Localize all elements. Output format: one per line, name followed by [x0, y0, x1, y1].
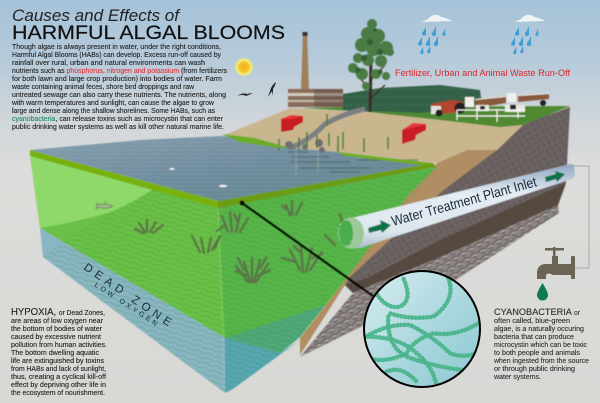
factory [288, 32, 343, 107]
green water drop [537, 283, 548, 300]
hypoxia text: The bottom dwelling aquatic [11, 349, 99, 357]
line to magnified circle [240, 200, 373, 296]
cornfield [343, 85, 482, 113]
deeper teal zone [225, 305, 325, 353]
front corner line [218, 207, 225, 393]
cyanobacteria text: microcystin which can be toxic [494, 342, 587, 349]
dead zone label: LOW OXYGEN [93, 282, 160, 329]
shoreline rocks [285, 139, 325, 153]
cows and fence [457, 105, 525, 122]
grass field [300, 106, 570, 127]
rain left [418, 26, 446, 54]
magnified cyanobacteria circle [363, 271, 480, 387]
cyanobacteria text [493, 307, 589, 381]
cloud right [514, 15, 545, 22]
red arrow left [281, 115, 303, 132]
front left face: green water [30, 155, 225, 338]
dead zone blue [40, 228, 225, 393]
tractor [431, 100, 466, 116]
cyanobacteria text: to both people and animals [494, 350, 581, 357]
hypoxia text: are areas of low oxygen near [11, 317, 104, 325]
intro paragraph: large and dense along the shallow shorelines. Some HABs, such as [12, 106, 215, 115]
aquatic plants [135, 201, 350, 282]
hypoxia text: the ecosystem of nourishment. [11, 389, 105, 397]
intro paragraph [11, 42, 227, 131]
bird right [268, 82, 276, 97]
cyanobacteria text: often called, blue-green [494, 318, 570, 325]
red arrow right [402, 123, 426, 144]
title: Causes and Effects of [12, 7, 181, 25]
reeds [279, 114, 388, 152]
pipe arrow right [545, 171, 565, 182]
hypoxia text: effect by depriving other life in [11, 381, 106, 389]
rain right [511, 26, 539, 54]
pipe arrow left [368, 220, 391, 233]
hypoxia text: life are extinguished by toxins [11, 357, 104, 365]
pipe label: Water Treatment Plant Inlet [390, 173, 538, 229]
hypoxia text [11, 307, 107, 397]
tree [348, 19, 394, 112]
intro paragraph: Though algae is always present in water, under the right conditions, [12, 42, 221, 51]
cyanobacteria text: algae, is a naturally occuring [494, 326, 584, 333]
water surface [30, 136, 433, 201]
sun [234, 57, 254, 77]
left shore green strip [222, 134, 290, 148]
sand beach [222, 108, 523, 163]
rock and soil cross-section [300, 107, 570, 357]
cyanobacteria filaments [363, 278, 478, 387]
reflections in water [288, 150, 418, 176]
intro paragraph: rainfall over rural, urban and natural environments can wash [12, 58, 205, 67]
green surface strip right [218, 163, 436, 208]
hypoxia text: from HABs and lack of sunlight, [11, 365, 106, 373]
trailers [465, 93, 549, 108]
hypoxia text: HYPOXIA, or Dead Zones, [11, 307, 105, 318]
cyanobacteria text: or through public drinking [494, 366, 575, 373]
run-off label: Fertilizer, Urban and Animal Waste Run-Off [395, 68, 570, 79]
intro paragraph: for both lawn and large crop production) into bodies of water. Farm [12, 74, 222, 83]
cyanobacteria text: CYANOBACTERIA or [494, 307, 581, 318]
cloud left [421, 15, 452, 22]
hypoxia text: caused by excessive nutrient [11, 333, 101, 341]
connector pipe line to tap [573, 166, 589, 268]
rock stream [290, 109, 365, 148]
sand band under shore [300, 150, 497, 355]
intro paragraph: Harmful Algal Blooms (HABs) can develop. Excess run-off caused by [12, 50, 221, 59]
cyanobacteria text: bacteria that can produce [494, 334, 574, 341]
cyanobacteria text: water systems. [493, 374, 541, 381]
light green upper water [30, 155, 152, 228]
dead zone label: DEAD ZONE [81, 262, 176, 331]
fish [96, 201, 113, 209]
shore green strip [337, 152, 433, 166]
intro paragraph: public drinking water systems as well as kill other natural marine life. [12, 122, 224, 131]
swan-like birds on water [170, 168, 227, 187]
hypoxia text: the bottom of bodies of water [11, 325, 103, 333]
intro paragraph: cyanobacteria, can release toxins such as microcystin that can enter [12, 114, 224, 123]
intro paragraph: nutrients such as phosphorus, nitrogen and potassium (from fertilizers [12, 66, 227, 75]
hypoxia text: thus, creating a cyclical kill-off [11, 373, 106, 381]
wave pattern [43, 167, 437, 393]
bird left [237, 93, 253, 96]
cyanobacteria text: when ingested from the source [493, 358, 589, 365]
title: HARMFUL ALGAL BLOOMS [12, 22, 285, 44]
intro paragraph: with warm temperatures and sunlight, can cause the algae to grow [11, 98, 215, 107]
intro paragraph: waste containing animal feces, shore bird droppings and raw [11, 82, 195, 91]
dead zone right blue [225, 338, 300, 393]
title [12, 7, 285, 44]
water tap icon [537, 247, 575, 279]
intro paragraph: untreated sewage can also carry these nutrients. The nutrients, along [12, 90, 226, 99]
green surface strip left [30, 150, 218, 208]
front right face: algae water [218, 167, 437, 353]
pipe inlet [338, 164, 575, 248]
hypoxia text: pollution from human activities. [11, 341, 107, 349]
